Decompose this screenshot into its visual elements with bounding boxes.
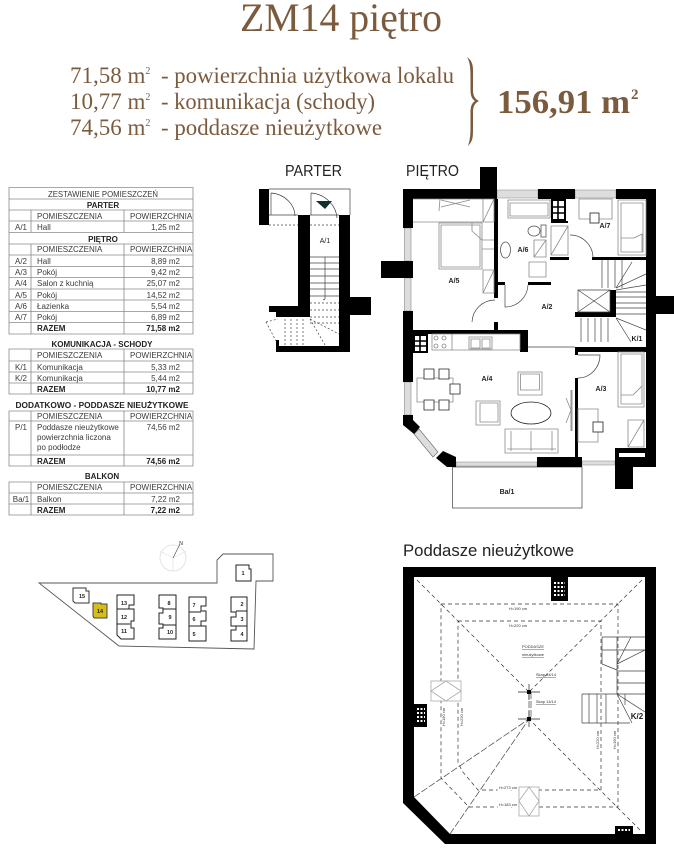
walls [381, 167, 674, 489]
area summary lines: 2 [145, 118, 150, 129]
table 1: parter and piętro: A/6 [15, 302, 28, 311]
table 2: komunikacja: RAZEM [37, 385, 66, 394]
table 1: parter and piętro: PIĘTRO [88, 235, 118, 244]
table 3: poddasze: DODATKOWO - PODDASZE NIEUŻYTKOWE [16, 401, 189, 410]
table 1: parter and piętro: POMIESZCZENIA [37, 212, 103, 221]
area summary lines: 10,77 m [70, 89, 145, 114]
table 1: parter and piętro: ZESTAWIENIE POMIESZCZEŃ [48, 190, 158, 199]
area summary lines: 2 [145, 92, 150, 103]
vents [415, 201, 564, 351]
heading: parter: PARTER [285, 163, 342, 180]
buildings 7 6 5 [189, 597, 206, 641]
balcony [452, 467, 582, 508]
table 1: parter and piętro: A/1 [15, 223, 28, 232]
table 3: poddasze: po podłodze [37, 443, 81, 452]
attic labels: H=190 cm [441, 707, 446, 726]
room labels: A/2 [542, 304, 553, 311]
table 4: balkon: BALKON [85, 472, 119, 481]
skylights [431, 681, 539, 816]
table 3: poddasze: POMIESZCZENIA [37, 412, 103, 421]
windows [404, 190, 616, 466]
table 4: balkon: 7,22 m2 [151, 506, 181, 515]
attic labels: Skap 34/14 [536, 672, 557, 677]
attic labels: H=190 cm [612, 730, 617, 749]
table 1: parter and piętro: Pokój [37, 313, 57, 322]
kitchen units [432, 334, 520, 350]
table 1: parter and piętro: 1,25 m2 [151, 223, 181, 232]
table 1: parter and piętro: Salon z kuchnią [37, 279, 94, 288]
room labels [449, 223, 643, 496]
table 1: parter and piętro: 5,54 m2 [151, 302, 181, 311]
table 1: parter and piętro: 25,07 m2 [147, 279, 181, 288]
room A/6 fixtures [508, 200, 568, 277]
table 1: parter and piętro: Hall [37, 223, 51, 232]
room A/7 furniture [579, 199, 646, 255]
total area: 2 [631, 87, 638, 103]
table 1: parter and piętro: RAZEM [37, 324, 66, 333]
table 2: komunikacja: Komunikacja [37, 374, 83, 383]
attic labels: K/2 [631, 712, 644, 721]
room labels: A/3 [596, 386, 607, 393]
room labels: K/1 [632, 336, 643, 343]
table 2: komunikacja: 10,77 m2 [146, 385, 181, 394]
attic labels: H=220 cm [509, 623, 528, 628]
table 2: komunikacja: Komunikacja [37, 363, 83, 372]
buildings 13 12 11 [117, 595, 134, 639]
attic labels: H=183 cm [499, 802, 518, 807]
attic vents [414, 577, 633, 834]
total area: 156,91 m [497, 84, 630, 121]
attic labels: Skap 14/14 [536, 699, 557, 704]
table 1: parter and piętro: A/5 [15, 291, 28, 300]
table 3: poddasze [9, 401, 193, 466]
attic labels [441, 606, 644, 807]
area summary lines: - poddasze nieużytkowe [161, 115, 382, 140]
table 2: komunikacja [9, 340, 193, 394]
buildings 2 3 4: 3 [240, 617, 244, 623]
buildings 7 6 5: 5 [192, 632, 196, 638]
table 3: poddasze: P/1 [15, 423, 28, 432]
buildings 13 12 11: 12 [121, 615, 127, 621]
floor plan: piętro [381, 167, 674, 508]
area summary lines: - powierzchnia użytkowa lokalu [161, 63, 454, 88]
floor plan: poddasze [403, 567, 656, 844]
buildings 7 6 5: 6 [192, 617, 196, 623]
door swings [472, 235, 600, 378]
attic labels: H=220 cm [595, 730, 600, 749]
ridge points [518, 684, 540, 727]
attic labels: nieużytkowe [522, 652, 545, 657]
table 1: parter and piętro: 71,58 m2 [146, 324, 181, 333]
room A/5 furniture [413, 199, 494, 293]
table 1: parter and piętro: POWIERZCHNIA [130, 245, 193, 254]
heading: piętro: PIĘTRO [406, 163, 459, 180]
table 4: balkon [9, 472, 193, 515]
parter stairs [310, 257, 339, 300]
table 2: komunikacja: POMIESZCZENIA [37, 351, 103, 360]
table 1: parter and piętro: Pokój [37, 291, 57, 300]
table: room schedule [9, 188, 193, 515]
table 1: parter and piętro: POMIESZCZENIA [37, 245, 103, 254]
building 1 [236, 565, 251, 581]
attic stairs K/2 [582, 637, 645, 723]
table 2: komunikacja: KOMUNIKACJA - SCHODY [51, 340, 153, 349]
table 4: balkon: Balkon [37, 495, 61, 504]
buildings 8 9 10: 10 [167, 630, 173, 636]
area summary lines: 74,56 m [70, 115, 145, 140]
floor plan: parter [259, 189, 371, 352]
table 2: komunikacja: 5,33 m2 [151, 363, 181, 372]
table 1: parter and piętro: Pokój [37, 268, 57, 277]
building 14 highlighted: 14 [97, 609, 104, 615]
brace [467, 57, 479, 146]
table 4: balkon: 7,22 m2 [151, 495, 181, 504]
attic labels: H=190 cm [509, 606, 528, 611]
table 1: parter and piętro: 6,89 m2 [151, 313, 181, 322]
attic labels: PODDASZE [522, 644, 544, 649]
table 3: poddasze: 74,56 m2 [147, 423, 181, 432]
table 2: komunikacja: POWIERZCHNIA [130, 351, 193, 360]
buildings 13 12 11: 13 [121, 601, 127, 607]
ridge and ceiling lines [417, 580, 642, 830]
room A/3 furniture [578, 352, 644, 447]
room labels: A/6 [518, 247, 529, 254]
attic walls [403, 567, 656, 844]
area summary lines: 71,58 m [70, 63, 145, 88]
table 2: komunikacja: K/1 [15, 363, 28, 372]
table 1: parter and piętro: Hall [37, 257, 51, 266]
table 3: poddasze: Poddasze nieużytkowe [37, 423, 119, 432]
stairs K/1 [528, 260, 646, 347]
table 1: parter and piętro: PARTER [87, 201, 119, 210]
table 1: parter and piętro: A/3 [15, 268, 28, 277]
compass: N [179, 541, 183, 547]
buildings 13 12 11: 11 [121, 629, 127, 635]
table 4: balkon: Ba/1 [13, 495, 30, 504]
site plan [39, 541, 273, 649]
table 1: parter and piętro [9, 188, 193, 334]
compass [160, 541, 186, 571]
table 1: parter and piętro: Łazienka [37, 302, 70, 311]
label: A/1: A/1 [320, 238, 330, 245]
building 15: 15 [79, 594, 85, 600]
room labels: A/7 [600, 223, 611, 230]
buildings 8 9 10: 9 [168, 615, 172, 621]
attic labels: H=273 cm [499, 785, 518, 790]
heading: poddasze: Poddasze nieużytkowe [403, 541, 574, 560]
table 1: parter and piętro: A/4 [15, 279, 28, 288]
table 4: balkon: RAZEM [37, 506, 66, 515]
table 1: parter and piętro: POWIERZCHNIA [130, 212, 193, 221]
table 4: balkon: POWIERZCHNIA [130, 483, 193, 492]
building 14 highlighted [93, 603, 107, 618]
area summary lines: - komunikacja (schody) [161, 89, 375, 114]
buildings 8 9 10: 8 [167, 601, 171, 607]
table 1: parter and piętro: 9,42 m2 [151, 268, 181, 277]
table 1: parter and piętro: A/2 [15, 257, 28, 266]
table 1: parter and piętro: 14,52 m2 [147, 291, 181, 300]
table 2: komunikacja: K/2 [15, 374, 28, 383]
attic labels: H=220 cm [459, 707, 464, 726]
room labels: A/4 [482, 376, 493, 383]
room labels: Ba/1 [500, 489, 514, 496]
table 3: poddasze: powierzchnia liczona [37, 433, 111, 442]
table 3: poddasze: 74,56 m2 [146, 457, 181, 466]
buildings 2 3 4: 4 [240, 632, 244, 638]
table 1: parter and piętro: 8,89 m2 [151, 257, 181, 266]
table 3: poddasze: POWIERZCHNIA [130, 412, 193, 421]
buildings 7 6 5: 7 [192, 603, 196, 609]
buildings 2 3 4: 2 [240, 602, 244, 608]
table 4: balkon: POMIESZCZENIA [37, 483, 103, 492]
buildings 8 9 10 [159, 595, 176, 639]
buildings 2 3 4 [231, 597, 247, 641]
room labels: A/5 [449, 278, 460, 285]
parter walls [259, 189, 371, 352]
area summary lines [70, 63, 454, 140]
building 15 [73, 588, 89, 603]
area summary lines: 2 [145, 66, 150, 77]
room A/4 furniture [417, 369, 572, 453]
table 3: poddasze: RAZEM [37, 457, 66, 466]
building 1: 1 [241, 571, 245, 577]
table 1: parter and piętro: A/7 [15, 313, 28, 322]
table 2: komunikacja: 5,44 m2 [151, 374, 181, 383]
entrance marker [316, 201, 332, 209]
